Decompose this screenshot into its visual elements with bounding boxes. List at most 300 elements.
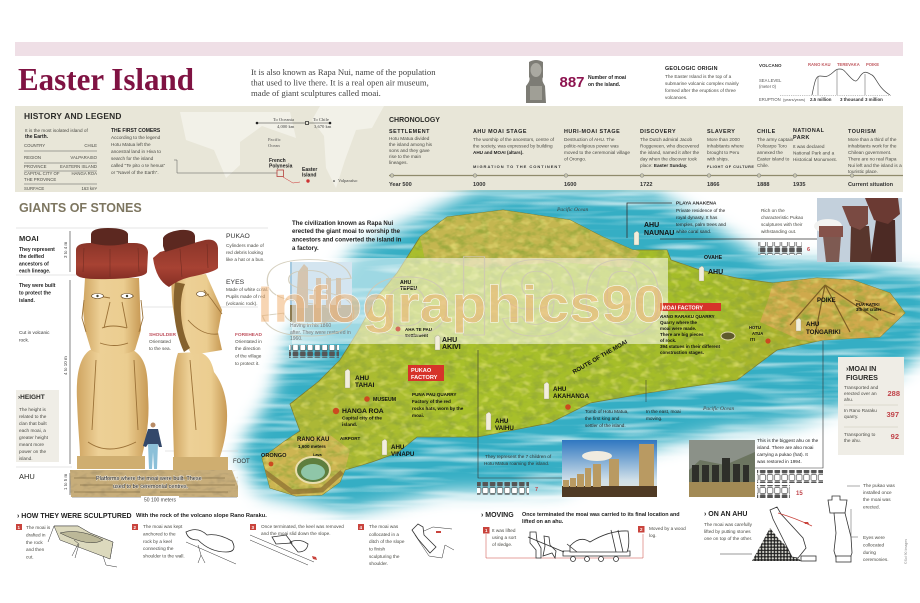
text: first comers: or "Navel of the Earth". bbox=[111, 170, 159, 175]
geologic origin: GEOLOGIC ORIGIN bbox=[665, 66, 718, 72]
map labels: HOTU bbox=[749, 325, 761, 330]
volcano chart: POIKE bbox=[866, 62, 879, 67]
callout: pukao sculptures bbox=[660, 208, 817, 255]
era: huri-moai stage: HURI-MOAI STAGE bbox=[564, 129, 620, 135]
era: national park: Historical Monument. bbox=[793, 157, 837, 162]
section: on an ahu: one on top of the other. bbox=[704, 536, 752, 541]
text: moai: ancestors of bbox=[19, 262, 49, 268]
text: first comers: Hotu Matua left the bbox=[111, 142, 151, 147]
callout: pukao sculptures: Rich on the bbox=[761, 208, 785, 213]
map labels: ROUTE OF THE MOAI bbox=[572, 339, 629, 376]
callout: tongariki: carrying a pukao (hat). It bbox=[757, 452, 809, 457]
era: discovery: The Dutch admiral Jacob bbox=[640, 137, 693, 142]
step 3 bbox=[250, 524, 344, 565]
illustration: ahu platform: Platforms where the moai were built. These bbox=[96, 476, 202, 482]
era: national park: PARK bbox=[793, 135, 810, 141]
map labels: ORONGO bbox=[261, 453, 287, 459]
terrain: northern plateau bbox=[420, 210, 640, 268]
text: eyes: Made of white coral. bbox=[226, 287, 268, 292]
map labels: POIKE bbox=[817, 298, 836, 304]
panel: height: greater height bbox=[19, 435, 49, 440]
era: tourism: Nui left and the island is a bbox=[848, 163, 902, 168]
fact table: THE PROVINCE bbox=[24, 177, 56, 182]
era: chile: Easter island to bbox=[757, 156, 790, 162]
map labels: AHU bbox=[708, 269, 723, 276]
label: pukao factory: PUKAO bbox=[411, 368, 432, 374]
pukao: side bbox=[153, 230, 218, 287]
text: forehead: the direction bbox=[235, 346, 261, 351]
map labels: 3th lot crater bbox=[856, 307, 882, 312]
geologic origin: The Easter Island is the top of a bbox=[665, 74, 732, 79]
volcano chart: (years/years) bbox=[783, 98, 806, 102]
panel: moai in figures: In Rano Raraku bbox=[844, 408, 877, 413]
era: chile: CHILE bbox=[757, 129, 776, 135]
illustration: finished moai: during bbox=[863, 550, 876, 555]
text: rano raraku: construction stages. bbox=[660, 350, 704, 355]
section: on an ahu: › ON AN AHU bbox=[704, 511, 747, 518]
locator map labels: To Chile bbox=[313, 117, 329, 122]
height scale bbox=[63, 231, 237, 497]
step 2 bbox=[132, 524, 236, 564]
step 3: Once terminated, the keel was removed bbox=[261, 524, 344, 529]
map labels: VAIHU bbox=[495, 425, 514, 432]
text: civilization intro bbox=[292, 220, 402, 252]
callout: tongariki bbox=[755, 341, 823, 498]
panel: height: island. bbox=[19, 456, 33, 461]
text: shoulder: Orientated bbox=[149, 339, 171, 344]
era: huri-moai stage: 1600 bbox=[564, 182, 576, 188]
era: settlement: lineages. bbox=[389, 160, 408, 165]
era: tourism: More than a third of the bbox=[848, 137, 897, 142]
map labels: AHU bbox=[391, 444, 405, 451]
width measure label bbox=[141, 496, 179, 504]
photo: pukao statues bbox=[814, 198, 902, 262]
photo: tongariki statues bbox=[689, 440, 755, 497]
step 4: sculpturing the bbox=[369, 554, 400, 559]
world map bbox=[180, 106, 384, 188]
era: slavery: 1866 bbox=[707, 182, 719, 188]
text: eyes: Pupils made of red bbox=[226, 294, 265, 299]
callout: tongariki: This is the biggest ahu on the bbox=[757, 438, 819, 443]
map labels: AHU bbox=[355, 375, 369, 382]
label: moai factory bbox=[660, 303, 721, 312]
step 2: anchored to the bbox=[143, 532, 176, 536]
era: settlement: sons and they gave bbox=[389, 148, 430, 153]
geologic origin: formed after the eruptions of three bbox=[665, 88, 736, 93]
text: moai: the deified bbox=[19, 254, 44, 260]
pukao: front bbox=[76, 228, 148, 279]
illustration: moai lifted on stones bbox=[720, 507, 816, 561]
step 3: 3 bbox=[252, 525, 254, 530]
era: settlement: Hotu Matua divided bbox=[389, 136, 430, 141]
era: tourism: There are no real Rapa bbox=[848, 156, 897, 162]
step 4: collocated in a bbox=[369, 532, 399, 537]
era: chile: Policarpo Toro bbox=[757, 144, 787, 148]
era: national park: National Park and a bbox=[793, 150, 835, 156]
era: discovery: day when the discover took bbox=[640, 156, 697, 162]
map labels: TEPEU bbox=[400, 286, 418, 292]
fact table: It is the most isolated island of bbox=[25, 128, 88, 133]
illustration: ahu platform: used to be ceremonial centres. bbox=[113, 484, 189, 490]
fact table: HANGA ROA bbox=[71, 171, 97, 176]
panel: history band bbox=[15, 106, 903, 192]
section: moving: Moved by a wood bbox=[649, 526, 686, 531]
text: first comers bbox=[111, 128, 165, 175]
era: discovery: Roggeveen, who discovered bbox=[640, 144, 700, 148]
section: moving: It was lifted bbox=[492, 528, 516, 533]
map labels: Settlement bbox=[405, 333, 429, 338]
map labels: ATUA bbox=[752, 331, 763, 336]
illustration: side moai bbox=[153, 230, 228, 470]
text: moai: MOAI bbox=[19, 234, 39, 243]
step 1: 1 bbox=[18, 525, 20, 530]
map labels: PUA KATIKI bbox=[856, 302, 880, 307]
step 4: The moai was bbox=[369, 524, 399, 529]
map labels: TAHAI bbox=[355, 382, 375, 389]
fact table bbox=[24, 128, 98, 191]
volcano chart: RANO KAU bbox=[808, 62, 831, 67]
text: pukao bbox=[226, 233, 265, 262]
text: rano raraku: There are big pieces bbox=[660, 332, 704, 337]
section: on an ahu: lifted by putting stones bbox=[704, 529, 751, 534]
map labels: AHU bbox=[806, 321, 820, 328]
illustration: person for scale bbox=[143, 422, 162, 469]
volcano chart: 2.5 million bbox=[810, 97, 832, 102]
locator map labels: Polynesia bbox=[269, 164, 293, 170]
era: chile: Chile. bbox=[757, 163, 769, 168]
era: tourism bbox=[848, 129, 902, 188]
era: settlement: SETTLEMENT bbox=[389, 129, 430, 135]
text: puna pau: PUNA PAU QUARRY bbox=[412, 392, 456, 397]
text: first comers: search for the island bbox=[111, 156, 154, 161]
map labels: OVAHE bbox=[704, 255, 723, 261]
era: ahu moai stage: AHU MOAI STAGE bbox=[473, 129, 527, 135]
illustration: finished moai: erected. bbox=[863, 504, 880, 510]
map labels: AHA TE PAU bbox=[405, 327, 432, 332]
era: discovery bbox=[640, 129, 700, 188]
era: chile: The army captain bbox=[757, 137, 794, 142]
map labels: TONGARIKI bbox=[806, 329, 841, 336]
text: puna pau: rocks hats, worn by the bbox=[412, 406, 464, 411]
map labels bbox=[261, 206, 882, 466]
text: moai: each lineage. bbox=[19, 268, 51, 274]
step 2: shoulder to the wall. bbox=[143, 554, 185, 558]
callout: playa anakena: white coral sand. bbox=[676, 229, 711, 234]
island map bbox=[250, 205, 910, 500]
fact table: REGION bbox=[24, 155, 41, 160]
section: moving: › MOVING bbox=[481, 512, 514, 519]
era: slavery: with ships. bbox=[707, 156, 729, 162]
geologic origin: volcanoes. bbox=[665, 95, 687, 100]
illustration: finished moai: collocated bbox=[863, 542, 885, 548]
illustration: finished moai: Eyes were bbox=[863, 535, 885, 540]
panel: height: related to the bbox=[19, 414, 47, 419]
step 2: connecting the bbox=[143, 546, 174, 551]
panel: moai in figures: 397 bbox=[886, 410, 899, 419]
panel: moai in figures: Transporting to bbox=[844, 432, 876, 437]
terrain: Poike peninsula bbox=[760, 278, 905, 342]
era: national park: It was declared bbox=[793, 144, 825, 149]
text: foot: FOOT bbox=[233, 459, 250, 465]
panel: moai in figures: 92 bbox=[891, 432, 899, 441]
intro text: that used to live there. It is a real open air museum, bbox=[251, 78, 429, 88]
era: ahu moai stage: AHU and MOAI (altars). bbox=[473, 150, 524, 155]
era: tourism: touristic place. bbox=[848, 169, 878, 174]
callout: playa anakena: Private residence of the bbox=[676, 208, 726, 213]
volcano chart bbox=[759, 62, 891, 102]
era: national park: NATIONAL bbox=[793, 128, 825, 134]
step 4: 4 bbox=[360, 525, 362, 530]
fact table: the Earth. bbox=[25, 134, 49, 140]
text: rano raraku: of rock. bbox=[660, 338, 676, 343]
text: shoulder: SHOULDER bbox=[149, 332, 176, 338]
callout: pukao sculptures: characteristic Pukao bbox=[761, 215, 804, 220]
text: forehead: to protect it. bbox=[235, 361, 260, 366]
text: pukao: Cylinders made of bbox=[226, 243, 264, 248]
text: rano raraku bbox=[660, 314, 721, 355]
panel: moai in figures bbox=[838, 357, 904, 455]
text: hidden ahu note under watermark: after. They were restored in bbox=[290, 330, 351, 336]
era: slavery bbox=[707, 129, 754, 188]
panel: height bbox=[16, 390, 59, 462]
panel: moai in figures: FIGURES bbox=[846, 373, 878, 382]
volcano chart: 3 million bbox=[865, 97, 883, 102]
fact table: SURFACE bbox=[24, 186, 44, 191]
callout: vaihu children: Hotu Matua roaming the island. bbox=[484, 461, 549, 466]
height scale: 4 to 10 m bbox=[63, 356, 68, 375]
heading: history and legend: HISTORY AND LEGEND bbox=[24, 111, 122, 121]
text: forehead: FOREHEAD bbox=[235, 332, 262, 338]
crater: Rano Raraku bbox=[721, 332, 735, 340]
step 3: and the moai slid down the slope. bbox=[261, 531, 331, 536]
era: ahu moai stage bbox=[473, 129, 562, 188]
header band bbox=[15, 42, 903, 56]
step 2: rock by a keel bbox=[143, 539, 172, 544]
panel: height: power on the bbox=[19, 449, 46, 454]
locator map labels: Pacific bbox=[268, 137, 281, 142]
panel: moai in figures: Transported and bbox=[844, 385, 879, 390]
map labels: Pacific Ocean bbox=[702, 405, 735, 412]
text: pukao: PUKAO bbox=[226, 233, 250, 240]
callout: hotu matua tomb: moving. bbox=[646, 416, 662, 421]
panel: moai in figures: ›MOAI IN bbox=[846, 364, 876, 373]
panel: moai in figures: quarry. bbox=[844, 414, 858, 419]
step 2: The moai was kept bbox=[143, 524, 183, 529]
era: ahu moai stage: the society, was expressed by building bbox=[473, 144, 553, 148]
label: pukao factory: FACTORY bbox=[411, 375, 438, 381]
section: moving: lifted on an ahu. bbox=[522, 519, 564, 525]
text: moai: to protect the bbox=[19, 290, 51, 296]
text: eyes bbox=[226, 279, 268, 306]
era: discovery: DISCOVERY bbox=[640, 129, 676, 135]
step 1 bbox=[16, 524, 117, 567]
map labels: AIRPORT bbox=[340, 436, 361, 441]
text: eyes: (volcanic rock). bbox=[226, 301, 258, 306]
map labels: island. bbox=[342, 422, 357, 428]
callout: vaihu children: 7 bbox=[535, 487, 538, 493]
callout: hotu matua tomb: In the east, moai bbox=[646, 409, 681, 414]
heading: giants of stones: GIANTS OF STONES bbox=[19, 201, 142, 215]
locator map labels bbox=[174, 117, 358, 183]
text: shoulder bbox=[149, 332, 176, 351]
map labels: NAUNAU bbox=[644, 230, 674, 237]
era: discovery: the island, named it after the bbox=[640, 150, 700, 155]
label: moai factory: MOAI FACTORY bbox=[662, 306, 703, 312]
era: ahu moai stage: 1000 bbox=[473, 182, 485, 188]
text: shoulder: to the sea. bbox=[149, 346, 171, 351]
illustration: front moai bbox=[76, 228, 149, 469]
callout: vaihu children: They represent the 7 children of bbox=[485, 454, 552, 459]
locator map labels: Valparaíso bbox=[338, 178, 358, 183]
measure lines bbox=[16, 228, 268, 467]
callout: playa anakena bbox=[627, 200, 726, 238]
illustration: finished moai: the moai was bbox=[863, 497, 891, 502]
fact table: CAPITAL CITY OF bbox=[24, 171, 60, 176]
text: puna pau bbox=[412, 392, 464, 418]
text: pukao: red debris looking bbox=[226, 250, 263, 255]
text: hidden ahu note under watermark bbox=[289, 323, 351, 358]
step 4: to finish bbox=[369, 546, 386, 552]
locator map labels: 4,000 km bbox=[277, 124, 295, 130]
intro text: It is also known as Rapa Nui, name of the population bbox=[251, 67, 436, 77]
map labels: 1,600 meters bbox=[298, 444, 326, 449]
watermark: Infographics90 bbox=[257, 276, 665, 334]
illustration: finished moai bbox=[828, 483, 895, 562]
locator map labels: Island bbox=[302, 172, 316, 178]
locator map labels: To Oceania bbox=[273, 117, 294, 122]
panel: height: ›HEIGHT bbox=[18, 394, 45, 401]
stat: 887 moai: Number of moai bbox=[588, 75, 627, 81]
title: Easter Island bbox=[18, 61, 194, 97]
text: forehead: of the village bbox=[235, 354, 262, 358]
era: slavery: inhabitants where bbox=[707, 144, 744, 148]
panel: moai in figures: erected over an bbox=[844, 391, 877, 396]
text: civilization intro: a factory. bbox=[292, 245, 319, 252]
callout: playa anakena: PLAYA ANAKENA bbox=[676, 200, 717, 206]
panel: height: each moai, a bbox=[19, 428, 46, 433]
section: moving: 2 bbox=[640, 527, 643, 532]
volcano chart: (meter 0) bbox=[759, 84, 777, 89]
era: huri-moai stage: Destruction of AHU. The bbox=[564, 137, 615, 142]
era: chile: annexed the bbox=[757, 150, 783, 155]
panel: moai in figures: ahu. bbox=[844, 397, 853, 402]
era: discovery: 1722 bbox=[640, 182, 652, 188]
map labels: AHU bbox=[400, 280, 411, 286]
text: eyes: EYES bbox=[226, 279, 245, 286]
era: chile bbox=[757, 129, 794, 188]
illustration: finished moai: installed once bbox=[863, 490, 892, 495]
text: civilization intro: The civilization known as Rapa Nui bbox=[292, 220, 394, 227]
intro text bbox=[251, 67, 436, 98]
era: settlement: rise to the main bbox=[389, 154, 421, 159]
text: civilization intro: ancestors and converted the island in bbox=[292, 236, 402, 244]
watermark: Sol90 bbox=[258, 237, 665, 358]
era: huri-moai stage: moved to the ceremonial village bbox=[564, 150, 630, 155]
illustration: finished moai: ceremonies. bbox=[863, 557, 889, 562]
text: puna pau: Factory of the red bbox=[412, 399, 451, 404]
text: rano raraku: Quarry where the bbox=[660, 320, 698, 325]
text: first comers: According to the legend bbox=[111, 135, 161, 140]
panel: height: clan that built bbox=[19, 421, 47, 426]
icon: moai statue bbox=[526, 60, 546, 103]
text: ahu: AHU bbox=[19, 472, 35, 481]
locator map labels: Easter bbox=[302, 167, 317, 173]
heading: chronology: CHRONOLOGY bbox=[389, 117, 440, 124]
panel: height: The height is bbox=[19, 407, 46, 412]
text: moai: rock. bbox=[19, 338, 29, 342]
callout: hotu matua tomb bbox=[585, 380, 681, 428]
locator map labels: 3,670 km bbox=[314, 124, 332, 130]
era: tourism: Current situation bbox=[848, 182, 894, 188]
callout: hotu matua tomb: the first king and bbox=[585, 416, 620, 421]
map labels: AKAHANGA bbox=[553, 393, 590, 400]
sea bbox=[220, 190, 920, 520]
illustration: ahu platform bbox=[70, 470, 238, 497]
era: tourism: TOURISM bbox=[848, 129, 876, 135]
map labels: Capital city of the bbox=[342, 416, 382, 422]
text: rano raraku: 394 statues in their different bbox=[660, 344, 721, 349]
stat: 887 moai: on the island. bbox=[588, 82, 621, 88]
callout: tongariki: was restored in 1994. bbox=[757, 459, 802, 464]
callout: pukao sculptures: withstanding out. bbox=[761, 229, 796, 234]
fact table: CHILE bbox=[84, 143, 97, 148]
era: settlement: Year 500 bbox=[389, 182, 412, 188]
photo: moai row under watermark bbox=[290, 262, 352, 322]
text: first comers: ancestral land in Hiva to bbox=[111, 149, 161, 154]
step 1: drafted in bbox=[26, 532, 46, 538]
map labels: AHU bbox=[644, 222, 659, 229]
volcano chart: 3 thousand bbox=[840, 97, 864, 102]
step 2: 2 bbox=[134, 525, 136, 530]
step 1: cut. bbox=[26, 554, 34, 560]
intro text: made of giant sculptures called moai. bbox=[251, 88, 381, 98]
callout: hotu matua tomb: Tomb of Hotu Matua, bbox=[585, 409, 629, 414]
section: moving: Once terminated the moai was carried to its final location and bbox=[522, 512, 680, 518]
crater: Rano Kau bbox=[296, 457, 330, 483]
section: moving: using a sort bbox=[492, 535, 517, 540]
width measure label: 50 100 meters bbox=[144, 498, 176, 504]
era: tourism: inhabitants work for the bbox=[848, 144, 897, 148]
callout: playa anakena: royal dynasty. It has bbox=[676, 215, 718, 220]
text: hidden ahu note under watermark: 1960. bbox=[290, 336, 303, 342]
height scale: 3 to 4 m bbox=[63, 241, 68, 258]
text: rano raraku: moai were made. bbox=[660, 326, 696, 331]
step 4 bbox=[358, 524, 454, 566]
height scale: 1 to 5 m bbox=[63, 473, 68, 490]
text: pukao: like a hat or a bun. bbox=[226, 257, 265, 262]
text: hidden ahu note under watermark: Having in his 1860 bbox=[290, 323, 331, 329]
text: moai: island. bbox=[19, 298, 35, 304]
text: forehead: Orientated in bbox=[235, 339, 262, 344]
era: tourism: Chilean government. bbox=[848, 150, 891, 155]
panel: moai in figures: the ahu. bbox=[844, 438, 861, 443]
map labels: ITI bbox=[750, 337, 755, 342]
section: how they were sculptured: With the rock of the volcano slope Rano Raraku. bbox=[136, 513, 267, 519]
section: on an ahu: The moai was carefully bbox=[704, 522, 753, 527]
era: huri-moai stage bbox=[564, 129, 630, 188]
text: rano raraku: RANO RARAKU QUARRY bbox=[660, 314, 715, 319]
step 4: ditch of the slope bbox=[369, 539, 405, 544]
callout: pukao sculptures: 6 bbox=[807, 247, 810, 253]
locator map labels: Ocean bbox=[268, 143, 280, 148]
section: moving: log. bbox=[649, 533, 657, 538]
callout: tongariki: island. There are also moai bbox=[757, 445, 813, 450]
stat: 887 moai bbox=[560, 74, 627, 91]
icons: ahu moai markers bbox=[345, 231, 801, 455]
fact table: PROVINCE bbox=[24, 164, 47, 169]
terrain: Rano Kau bbox=[262, 435, 350, 496]
volcano chart: VOLCANO bbox=[759, 63, 782, 68]
